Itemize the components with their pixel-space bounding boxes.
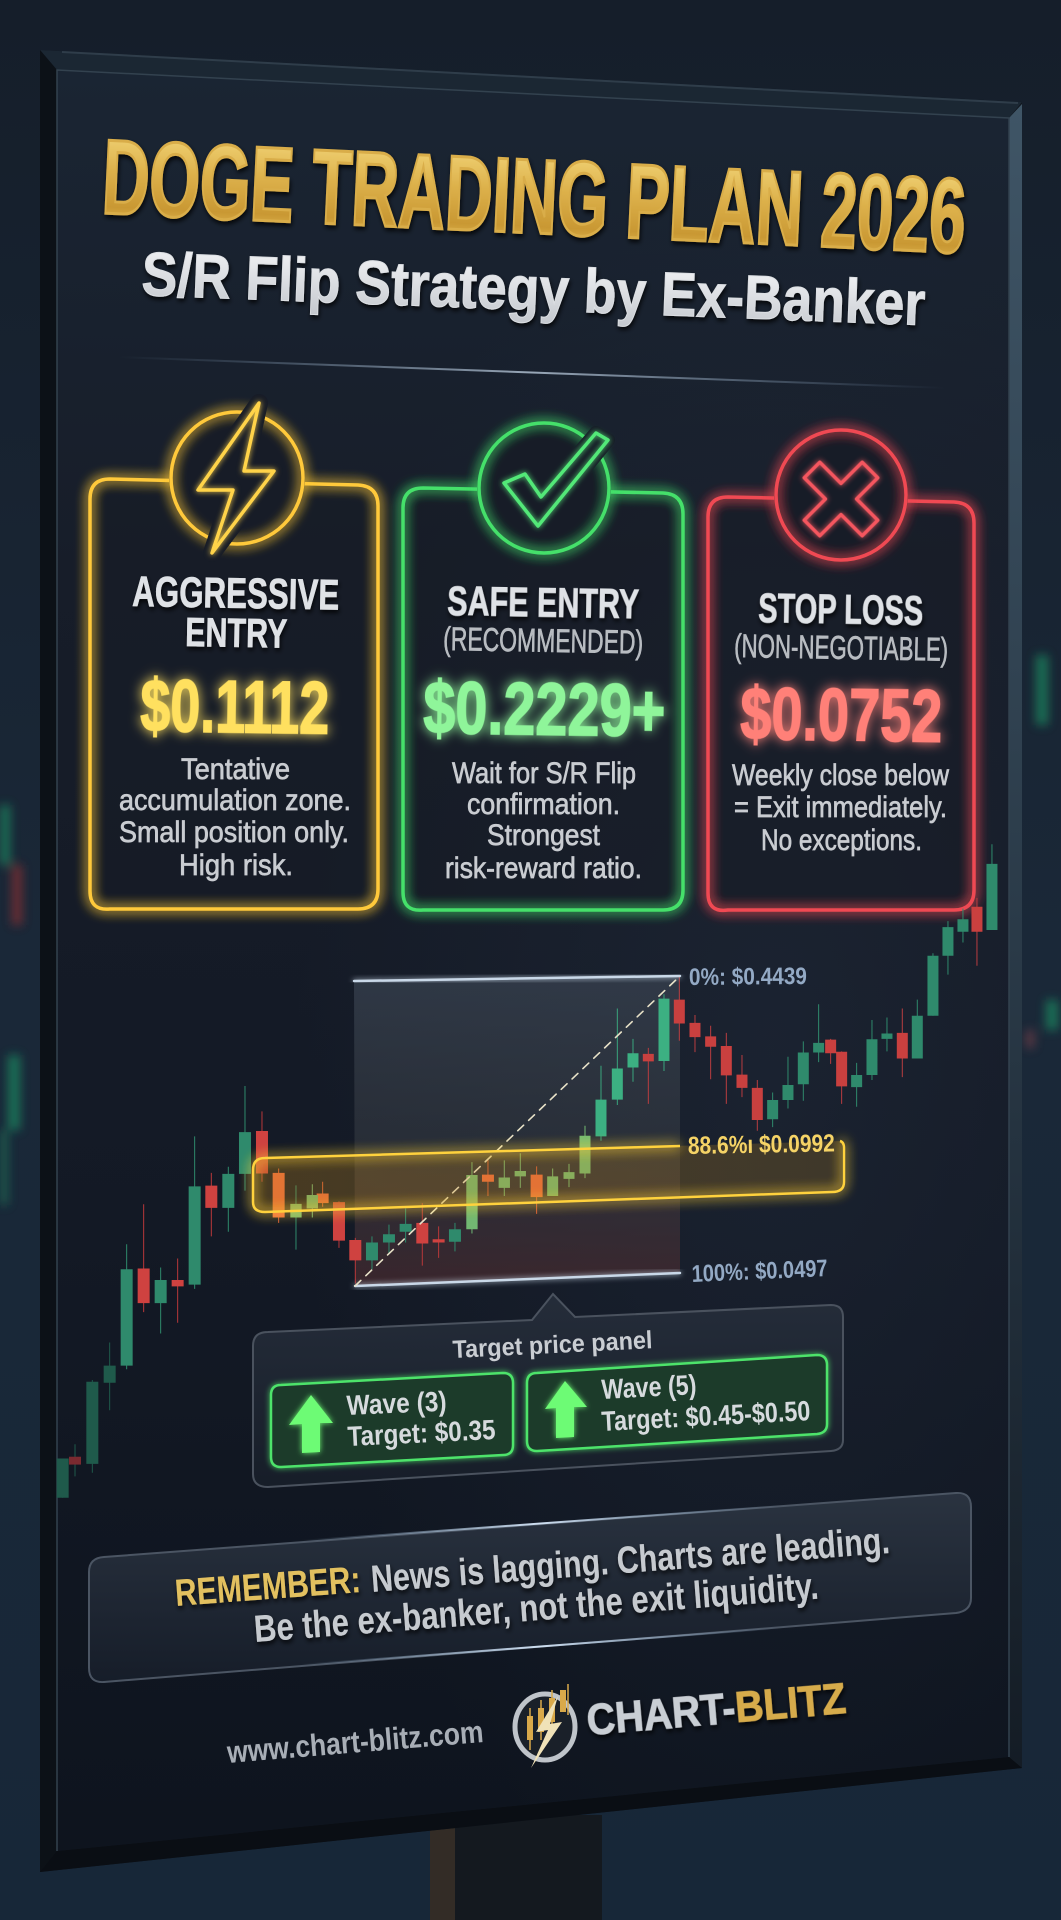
subtitle: S/R Flip Strategy by Ex-Banker [140, 240, 927, 339]
description: accumulation zone. [119, 784, 351, 817]
fibonacci box [354, 976, 680, 1286]
callout text: Be the ex-banker, not the exit liquidity. [252, 1566, 820, 1651]
description: High risk. [179, 849, 293, 882]
card outline: yellow [90, 479, 378, 909]
card outline: green [403, 488, 683, 910]
level label 88.6%: 88.6%ı $0.0992 [688, 1129, 835, 1160]
heading: ENTRY [185, 609, 288, 657]
description: Wait for S/R Flip [452, 757, 636, 790]
panel: remember callout [89, 1493, 971, 1682]
left candlesticks [63, 1086, 537, 1498]
highlighted golden zone [253, 1141, 844, 1212]
brand name: CHART-BLITZ [585, 1674, 848, 1745]
panel: target price [253, 1294, 843, 1487]
target: wave 5: Target: $0.45-$0.50 [601, 1395, 811, 1437]
card outline: red [708, 497, 974, 910]
blurred background candles [0, 655, 1058, 1205]
sub-heading: (NON-NEGOTIABLE) [734, 627, 948, 668]
level label 100%: 100%: $0.0497 [691, 1255, 828, 1288]
callout text: News is lagging. Charts are leading. [370, 1520, 891, 1601]
description [445, 757, 642, 885]
monitor stand [430, 1815, 602, 1920]
description: Weekly close below [732, 759, 949, 792]
panel: safe entry [403, 421, 683, 910]
description: No exceptions. [761, 824, 922, 857]
icon: up arrow [545, 1381, 587, 1438]
panel: stop loss [708, 428, 974, 910]
description: Strongest [487, 819, 601, 852]
description: confirmation. [467, 788, 620, 821]
description [119, 753, 351, 882]
icon: logo mark [515, 1684, 575, 1768]
target: wave 3: Wave (3) [346, 1386, 447, 1421]
target: wave 5: Wave (5) [601, 1369, 697, 1405]
description: risk-reward ratio. [445, 852, 642, 885]
icon: lightning bolt in circle [171, 403, 303, 553]
chart: candlesticks with fibonacci levels [63, 844, 992, 1498]
logo [515, 1674, 848, 1768]
heading: SAFE ENTRY [447, 577, 640, 627]
callout text: REMEMBER: [174, 1559, 362, 1615]
description: Tentative [181, 753, 290, 786]
website url: www.chart-blitz.com [225, 1714, 485, 1770]
panel: aggressive entry [90, 403, 378, 909]
price: $0.2229+ [423, 666, 666, 752]
icon: check mark in circle [479, 423, 609, 553]
panel body with pointer [253, 1294, 843, 1487]
target: wave 3: Target: $0.35 [347, 1414, 496, 1452]
fibonacci lines [354, 976, 680, 1286]
heading: AGGRESSIVE [132, 568, 340, 620]
sub-heading: (RECOMMENDED) [443, 620, 643, 660]
level label 0%: 0%: $0.4439 [689, 963, 807, 991]
panel heading: Target price panel [452, 1326, 653, 1364]
description [732, 759, 949, 857]
description: = Exit immediately. [734, 791, 947, 824]
price: $0.0752 [740, 672, 943, 758]
description: Small position only. [119, 816, 349, 849]
icon: up arrow [289, 1395, 333, 1453]
callout text [174, 1520, 891, 1651]
price: $0.1112 [140, 664, 330, 750]
right candlesticks [553, 844, 992, 1196]
target: wave 5 [527, 1355, 827, 1451]
heading [132, 568, 340, 657]
target: wave 3 [271, 1373, 513, 1467]
icon: x in circle [776, 430, 906, 560]
heading: STOP LOSS [758, 584, 924, 634]
